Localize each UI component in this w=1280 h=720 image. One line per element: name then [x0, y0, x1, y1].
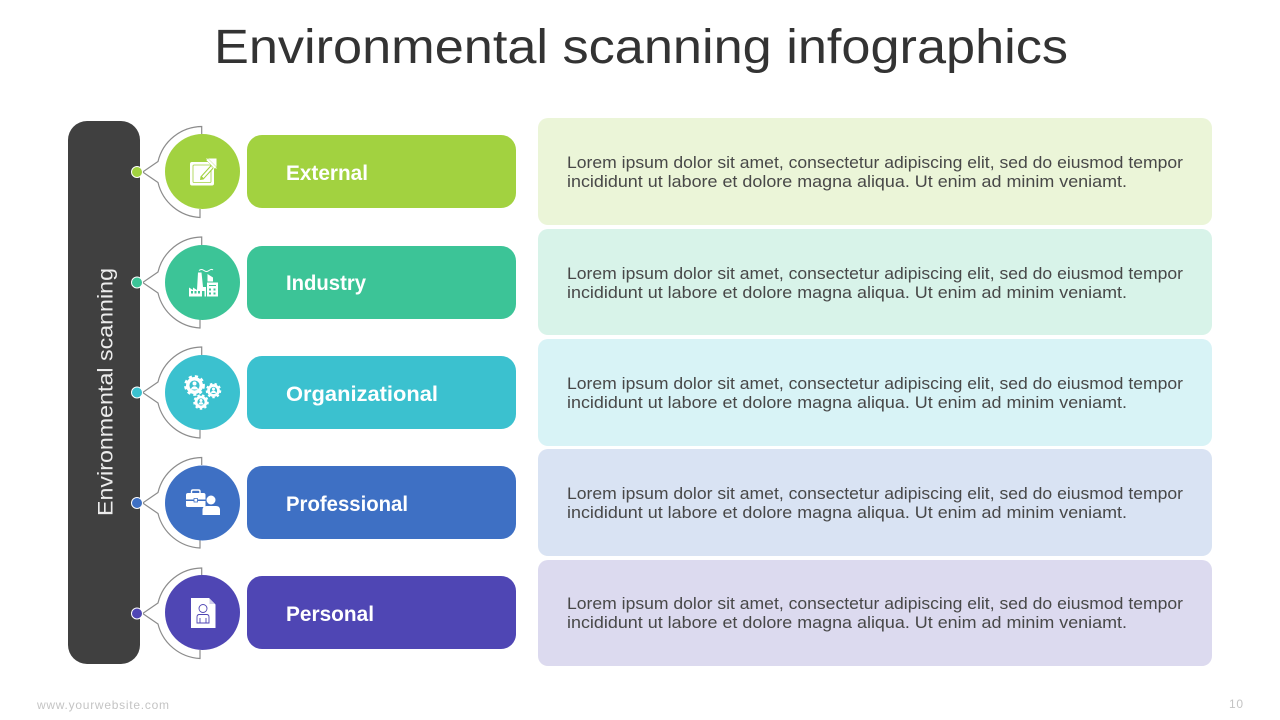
- connector bracket: [143, 458, 202, 548]
- label pill: [247, 466, 516, 539]
- row: Professional: [132, 449, 1212, 556]
- label pill: [247, 135, 516, 208]
- text panel: [538, 449, 1212, 556]
- description: incididunt ut labore et dolore magna aliqua. Ut enim ad minim veniamt.: [567, 613, 1127, 632]
- connector bracket: [143, 237, 202, 328]
- circle: [165, 134, 240, 209]
- page number: 10: [1229, 697, 1243, 711]
- circle: [165, 575, 240, 650]
- label pill: [247, 246, 516, 319]
- footer website: www.yourwebsite.com: [36, 698, 169, 712]
- connector dot: [132, 387, 142, 398]
- description: Lorem ipsum dolor sit amet, consectetur adipiscing elit, sed do eiusmod tempor: [567, 264, 1183, 283]
- circle: [165, 245, 240, 320]
- label: Personal: [286, 603, 374, 626]
- icon: briefcase and person: [186, 490, 220, 515]
- vertical bar: Environmental scanning: [68, 121, 140, 664]
- connector dot: [132, 277, 142, 288]
- connector bracket: [143, 568, 202, 658]
- description: Lorem ipsum dolor sit amet, consectetur adipiscing elit, sed do eiusmod tempor: [567, 153, 1183, 172]
- connector bracket: [143, 347, 202, 438]
- icon: profile document: [191, 598, 216, 628]
- text panel: [538, 560, 1212, 666]
- row: External: [132, 118, 1212, 225]
- description: incididunt ut labore et dolore magna aliqua. Ut enim ad minim veniamt.: [567, 503, 1127, 522]
- label: Professional: [286, 493, 408, 516]
- text panel: [538, 229, 1212, 335]
- label: Industry: [286, 272, 366, 295]
- circle: [165, 466, 240, 540]
- connector dot: [132, 166, 142, 178]
- title: Environmental scanning infographics: [214, 21, 1068, 74]
- label pill: [247, 576, 516, 649]
- description: Lorem ipsum dolor sit amet, consectetur adipiscing elit, sed do eiusmod tempor: [567, 594, 1183, 613]
- description: incididunt ut labore et dolore magna aliqua. Ut enim ad minim veniamt.: [567, 172, 1127, 191]
- icon: gears with people: [185, 376, 220, 409]
- label pill: [247, 356, 516, 429]
- text panel: [538, 118, 1212, 225]
- row: Organizational: [132, 339, 1212, 446]
- circle: [165, 355, 240, 430]
- label: Organizational: [286, 383, 438, 406]
- row: Personal: [132, 560, 1212, 666]
- icon: factory: [189, 269, 218, 296]
- description: incididunt ut labore et dolore magna aliqua. Ut enim ad minim veniamt.: [567, 283, 1127, 302]
- icon: external link: [190, 158, 216, 186]
- connector dot: [132, 498, 142, 508]
- row: Industry: [132, 229, 1212, 335]
- description: incididunt ut labore et dolore magna aliqua. Ut enim ad minim veniamt.: [567, 393, 1127, 412]
- connector dot: [132, 608, 142, 619]
- vertical bar: Environmental scanning: Environmental scanning: [94, 268, 118, 516]
- description: Lorem ipsum dolor sit amet, consectetur adipiscing elit, sed do eiusmod tempor: [567, 484, 1183, 503]
- description: Lorem ipsum dolor sit amet, consectetur adipiscing elit, sed do eiusmod tempor: [567, 374, 1183, 393]
- text panel: [538, 339, 1212, 446]
- connector bracket: [143, 126, 202, 218]
- label: External: [286, 162, 368, 185]
